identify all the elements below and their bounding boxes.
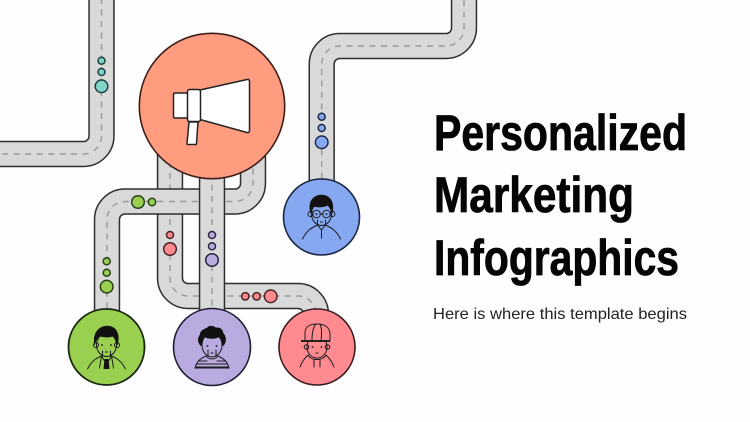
dots: blue	[315, 113, 328, 149]
avatar: blue person with glasses	[284, 179, 360, 255]
subtitle: Here is where this template begins	[433, 306, 687, 323]
road: top-left teal route	[0, 0, 108, 154]
title	[434, 105, 687, 286]
avatar: lavender person in striped shirt	[174, 308, 250, 386]
icon: megaphone	[174, 79, 250, 144]
road: green route	[100, 150, 253, 320]
dots: green	[100, 196, 156, 293]
road: top-right blue route	[315, 0, 464, 190]
dots: teal	[95, 57, 108, 93]
title: Infographics	[434, 230, 679, 286]
road: lavender route	[206, 150, 218, 320]
title: Marketing	[434, 167, 634, 223]
road: pink route	[164, 150, 316, 326]
dots: lavender	[206, 232, 218, 266]
avatar: green person in suit	[68, 309, 144, 385]
avatar: pink person with cap	[279, 309, 355, 385]
main circle with megaphone	[139, 33, 285, 179]
title: Personalized	[434, 105, 687, 161]
dots: pink	[164, 232, 277, 303]
